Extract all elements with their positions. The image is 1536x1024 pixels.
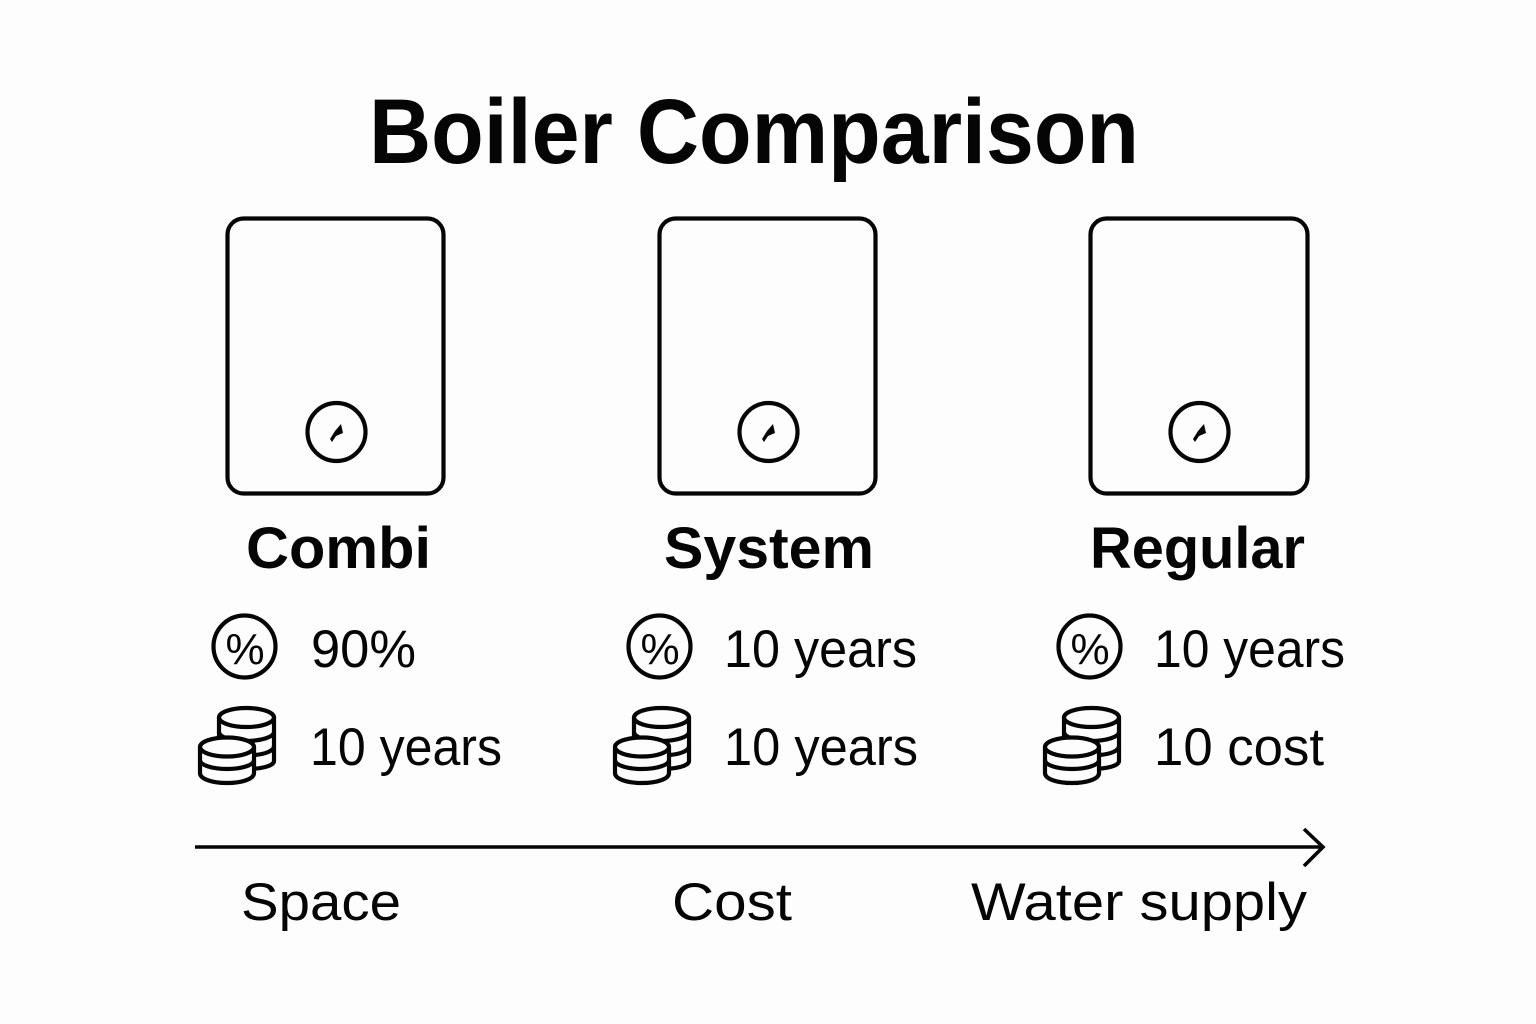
text: regular efficiency: 10 years <box>1154 620 1345 679</box>
axis label: cost: Cost <box>672 873 792 932</box>
icon: percent: % <box>225 625 265 674</box>
text: combi lifespan: 10 years <box>310 718 502 777</box>
icon: system boiler <box>660 218 876 494</box>
panel: system <box>615 218 918 783</box>
icon: coins <box>1045 708 1119 783</box>
heading: system: System <box>664 516 874 581</box>
arrow: comparison axis <box>195 829 1323 866</box>
axis label: water supply: Water supply <box>971 873 1308 932</box>
text: combi efficiency: 90% <box>311 620 416 679</box>
title: Boiler Comparison <box>369 81 1139 183</box>
icon: percent <box>1058 616 1120 678</box>
icon: coins <box>615 708 689 783</box>
icon: percent <box>214 616 276 678</box>
text: system efficiency: 10 years <box>724 620 917 679</box>
heading: combi: Combi <box>246 516 431 581</box>
icon: regular boiler <box>1090 218 1308 494</box>
icon: coins <box>200 708 274 783</box>
icon: percent <box>628 616 690 678</box>
heading: regular: Regular <box>1090 516 1305 581</box>
panel: combi <box>200 218 502 783</box>
text: system lifespan: 10 years <box>724 718 918 777</box>
axis label: space: Space <box>241 873 401 932</box>
icon: combi boiler <box>228 218 444 494</box>
panel: regular <box>1045 218 1345 783</box>
icon: percent: % <box>1070 625 1110 674</box>
icon: percent: % <box>640 625 680 674</box>
text: regular cost: 10 cost <box>1154 718 1324 777</box>
